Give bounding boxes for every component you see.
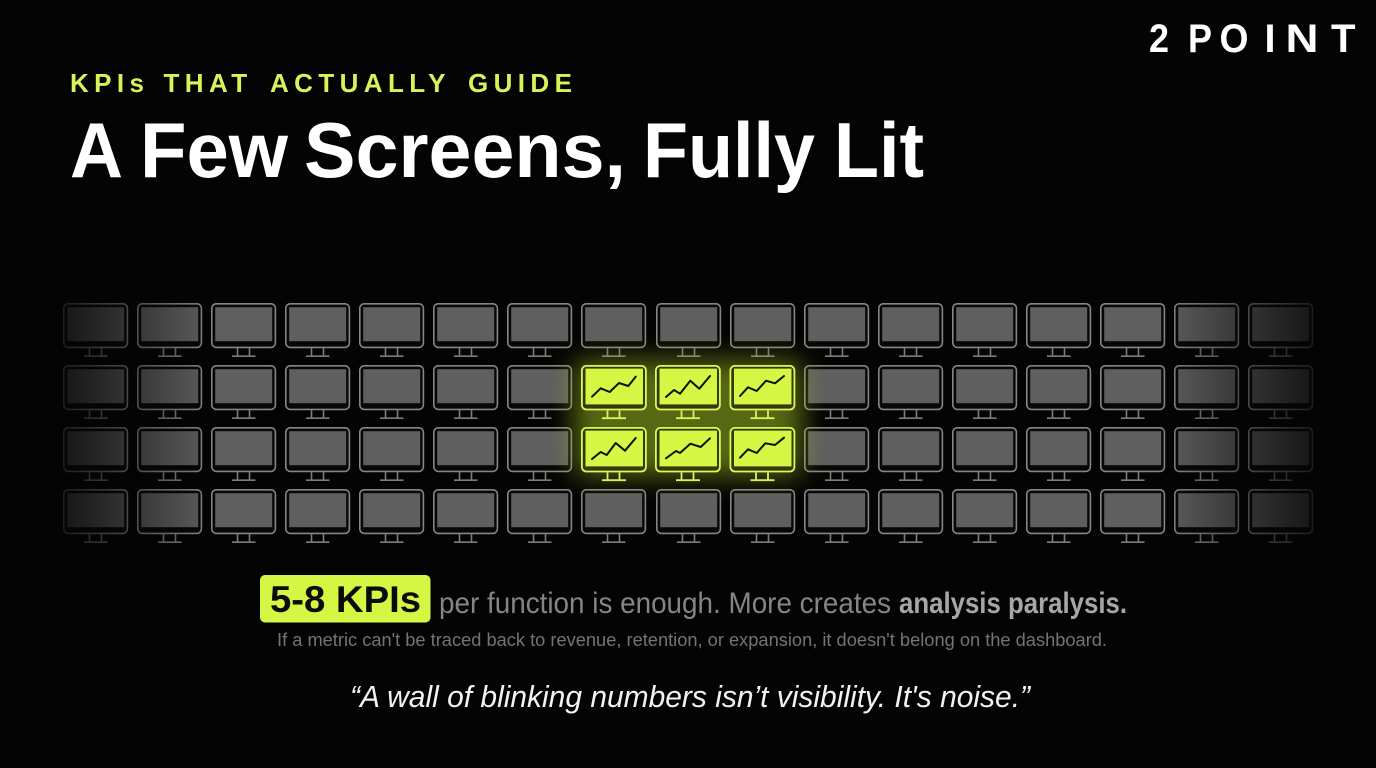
row 1 of dim monitors <box>64 304 1312 356</box>
quote: “A wall of blinking numbers isn’t visibility. It's noise.” <box>350 680 1032 714</box>
logo <box>1149 17 1356 61</box>
edge fade <box>58 296 1318 548</box>
logo: T <box>1331 17 1356 61</box>
eyebrow heading: ACTUALLY <box>270 68 450 98</box>
title: Screens, <box>304 106 626 194</box>
logo: P <box>1188 17 1212 61</box>
logo: I <box>1264 17 1276 61</box>
lit monitors with trend lines <box>582 366 794 480</box>
monitor wall <box>58 296 1318 548</box>
KPI badge: 5-8 KPIs <box>270 579 421 620</box>
title <box>70 106 924 194</box>
row 4 of dim monitors <box>64 490 1312 542</box>
row 3 of dim monitors <box>64 428 1312 480</box>
eyebrow heading: KPIs <box>70 68 149 98</box>
logo: O <box>1220 17 1248 61</box>
eyebrow heading: GUIDE <box>468 68 577 98</box>
logo: N <box>1286 17 1318 61</box>
supporting sentence: If a metric can't be traced back to revenue, retention, or expansion, it doesn't belong on the dashboard. <box>277 630 1107 650</box>
title: A <box>70 106 123 194</box>
title: Fully <box>643 106 815 194</box>
title: Lit <box>834 106 924 194</box>
title: Few <box>140 106 288 194</box>
main statement: per function is enough. More creates <box>439 587 891 620</box>
emphasis: analysis paralysis: analysis paralysis. <box>899 587 1127 620</box>
eyebrow heading: THAT <box>164 68 252 98</box>
logo: 2 <box>1149 17 1169 61</box>
glow behind lit monitors <box>574 360 802 476</box>
row 2 of dim monitors <box>64 366 1312 418</box>
